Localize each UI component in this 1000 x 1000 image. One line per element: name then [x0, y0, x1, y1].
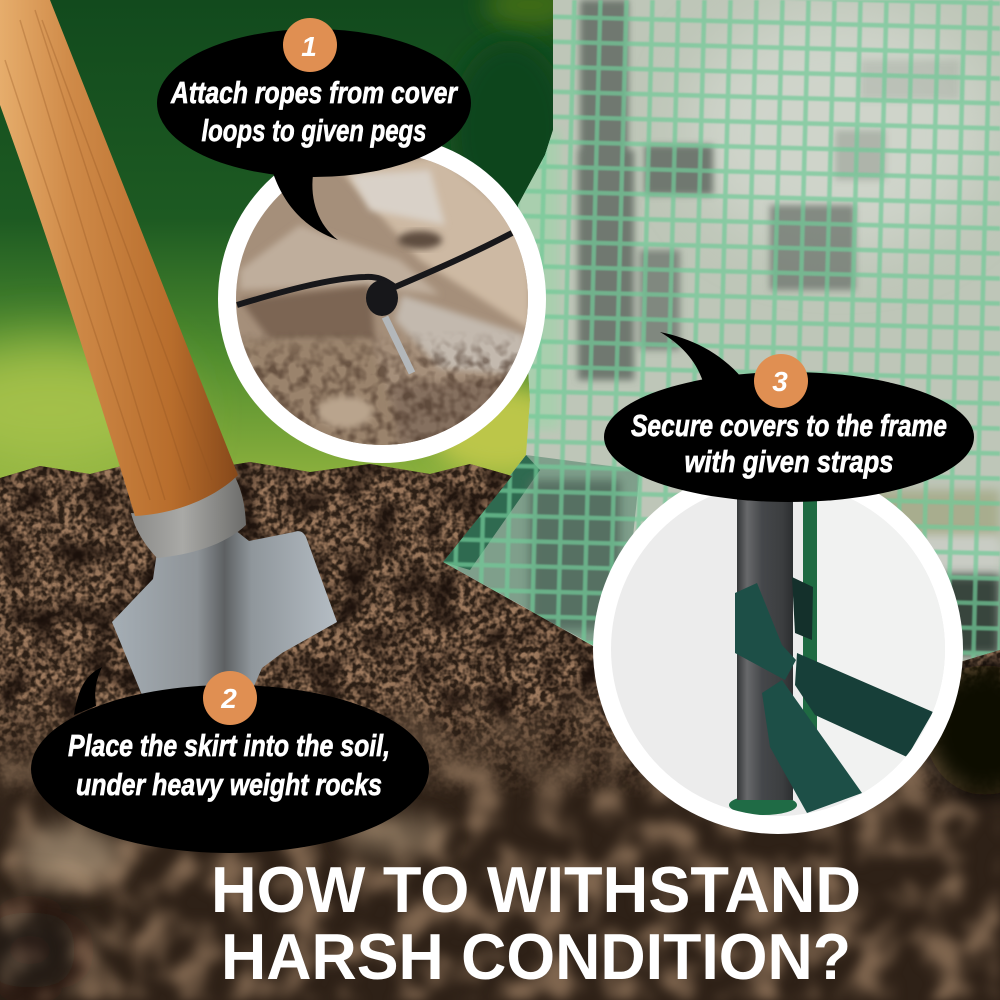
- callout 1: 1: [301, 31, 317, 62]
- callout 2: 2: [220, 683, 237, 714]
- trowel: [0, 0, 337, 695]
- callout 2 text: [68, 728, 390, 802]
- background: blurred garden: [0, 0, 1000, 520]
- callout 1 text: Attach ropes from cover: [170, 75, 459, 110]
- callout 1 text: loops to given pegs: [202, 113, 426, 148]
- callout 2 text: under heavy weight rocks: [76, 767, 382, 802]
- callout 3 text: [631, 408, 947, 479]
- wooden handle: [0, 0, 238, 516]
- badge 1: [283, 18, 337, 72]
- rope and peg: [237, 233, 512, 373]
- callout 2: [31, 667, 429, 853]
- callout 1: [157, 18, 471, 240]
- callout 3: [604, 332, 974, 502]
- badge 3: [754, 354, 808, 408]
- greenhouse cover: [430, 0, 1000, 700]
- callout 2 text: Place the skirt into the soil,: [68, 728, 390, 763]
- soil ground: [0, 450, 1000, 1000]
- callout 3: 3: [772, 366, 788, 397]
- panel: step 3 photo: [593, 464, 963, 834]
- panel: step 1 photo: [218, 135, 546, 463]
- lower skirt: [443, 455, 640, 660]
- trowel blade: [112, 530, 337, 695]
- badge 2: [203, 671, 257, 725]
- pole: [729, 798, 797, 815]
- dark cells seen through mesh: [578, 0, 960, 380]
- callout 3 text: with given straps: [684, 444, 894, 479]
- strap: [735, 577, 933, 813]
- trowel collar: [131, 477, 246, 558]
- callout 1 text: [170, 75, 459, 148]
- title: HARSH CONDITION?: [221, 920, 851, 993]
- title: HOW TO WITHSTAND: [211, 853, 861, 926]
- title: [211, 853, 861, 993]
